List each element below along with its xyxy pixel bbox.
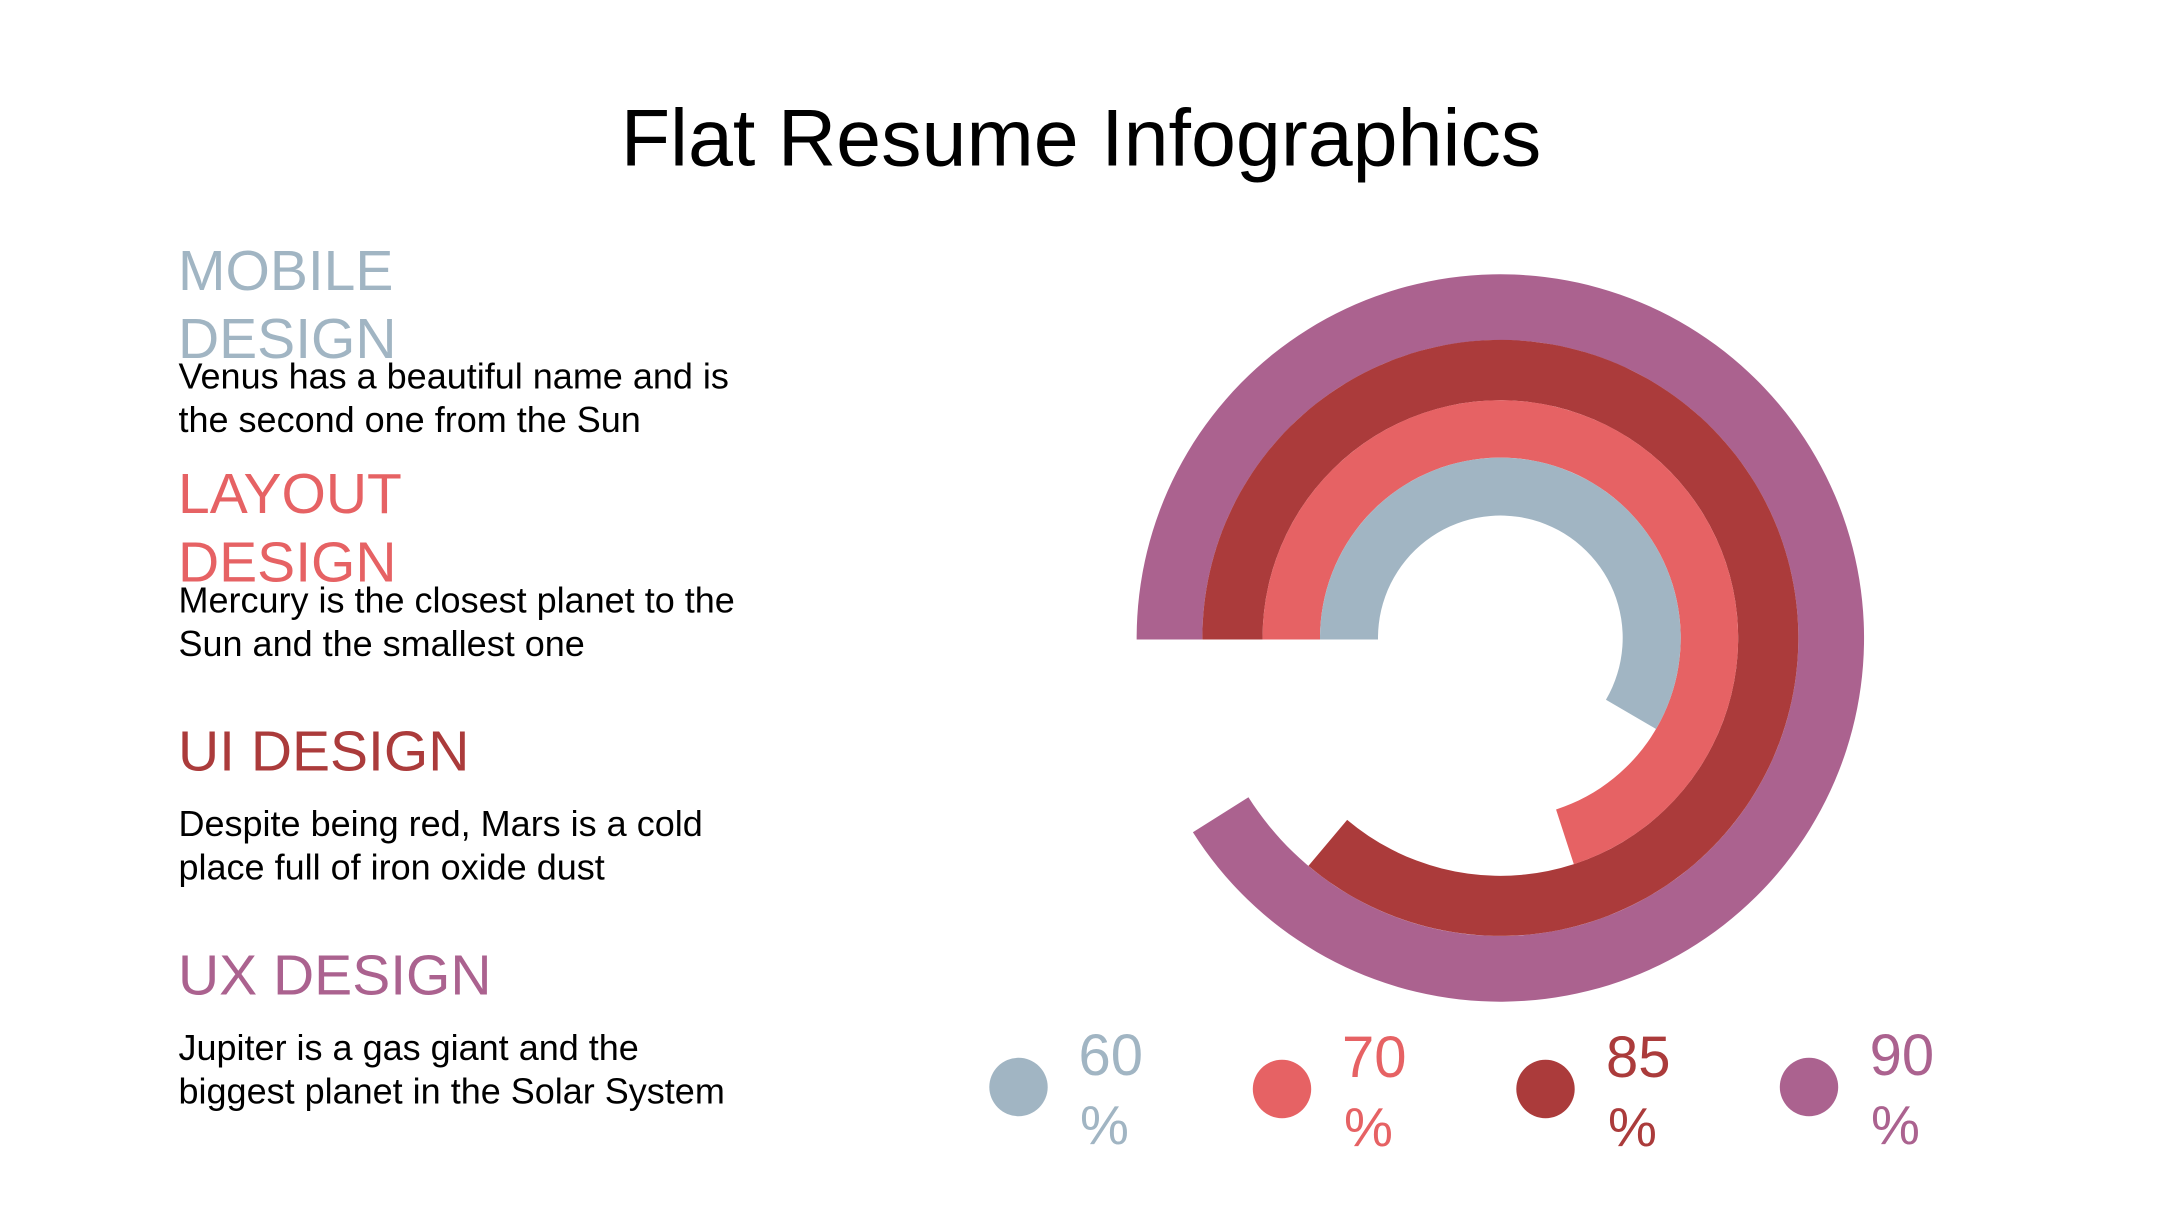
skill: ux design: biggest planet in the Solar System [178, 1070, 725, 1112]
skill: ux design [178, 944, 725, 1112]
skill: mobile design: Venus has a beautiful name and is [178, 356, 729, 396]
legend item: 60 percent: 60 [1078, 1023, 1143, 1088]
skill: ui design: UI DESIGN [178, 720, 469, 784]
skill: layout design: Sun and the smallest one [178, 623, 585, 664]
legend item: 90 percent: 90 [1870, 1023, 1934, 1088]
legend item: 70 percent: 70 [1342, 1025, 1407, 1090]
skill: ui design [178, 720, 703, 888]
skill: mobile design: DESIGN [178, 307, 397, 371]
legend item: 60 percent [989, 1023, 1143, 1156]
panel: skill descriptions [178, 239, 735, 1112]
skill: layout design: LAYOUT [178, 462, 402, 526]
legend item: 60 percent: % [1080, 1094, 1129, 1156]
legend item: 85 percent: 85 [1606, 1025, 1671, 1090]
skill: ux design: Jupiter is a gas giant and the [178, 1027, 639, 1068]
skill: layout design: Mercury is the closest planet to the [178, 580, 735, 620]
skill: mobile design: MOBILE [178, 239, 393, 303]
legend item: 85 percent [1516, 1025, 1671, 1158]
legend item: 90 percent [1780, 1023, 1934, 1156]
skill: mobile design [178, 239, 729, 440]
radial bar chart [1137, 274, 1864, 1002]
ring: 60 percent [1320, 458, 1681, 729]
ring: 70 percent [1263, 400, 1738, 864]
ring: 85 percent [1202, 340, 1798, 936]
legend item: 85 percent: % [1608, 1096, 1657, 1158]
skill: ui design: Despite being red, Mars is a cold [178, 803, 703, 844]
title: Flat Resume Infographics [621, 94, 1541, 184]
skill: ui design: place full of iron oxide dust [178, 846, 605, 888]
skill: layout design: DESIGN [178, 530, 397, 594]
skill: mobile design: the second one from the Sun [178, 399, 641, 440]
ring: 90 percent [1137, 274, 1864, 1002]
legend [989, 1023, 1934, 1158]
legend item: 70 percent: % [1344, 1096, 1393, 1158]
skill: ux design: UX DESIGN [178, 944, 492, 1008]
legend item: 90 percent: % [1871, 1094, 1920, 1156]
skill: layout design [178, 462, 735, 664]
legend item: 70 percent [1253, 1025, 1407, 1158]
